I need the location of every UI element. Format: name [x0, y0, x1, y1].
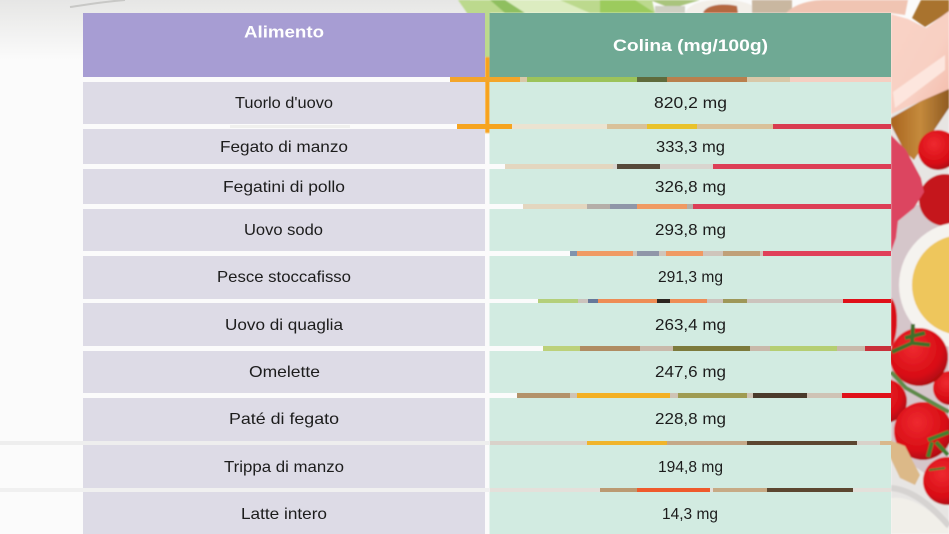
row: Paté di fegato: [83, 398, 891, 441]
yellow bowl: [899, 222, 949, 348]
tomato 1: [918, 130, 949, 170]
wooden board: [912, 0, 949, 27]
row: Trippa di manzo: [83, 445, 891, 488]
nut bowl: [685, 0, 760, 13]
row: Paté di fegato: 228,8 mg: [655, 411, 726, 428]
row: Omelette: Omelette: [249, 364, 320, 381]
row: Uovo sodo: Uovo sodo: [244, 222, 323, 239]
row: Trippa di manzo: 194,8 mg: [658, 459, 723, 476]
row: Fegato di manzo: [83, 129, 891, 164]
lettuce: [458, 0, 655, 57]
row: Latte intero: 14,3 mg: [662, 506, 718, 523]
photo strip gaps: [450, 77, 891, 492]
row: Fegato di manzo: Fegato di manzo: [220, 139, 348, 156]
vertical orange stripe: [485, 57, 490, 133]
raw meat: [891, 135, 924, 252]
row: Latte intero: [83, 492, 891, 534]
row: Tuorlo d'uovo: Tuorlo d'uovo: [235, 95, 333, 112]
row: Paté di fegato: Paté di fegato: [229, 411, 339, 428]
row: Uovo sodo: [83, 209, 891, 251]
chicken top: [786, 0, 908, 15]
row: Fegato di manzo: 333,3 mg: [656, 139, 725, 156]
row: Tuorlo d'uovo: [83, 82, 891, 124]
white plate: [891, 498, 949, 534]
row: Fegatini di pollo: 326,8 mg: [655, 179, 726, 196]
backdrop near chicken: [752, 0, 792, 13]
row: Fegatini di pollo: Fegatini di pollo: [223, 179, 345, 196]
table header: Colina: Colina (mg/100g): [613, 36, 768, 55]
chicken breast: [891, 11, 949, 114]
row: Omelette: 247,6 mg: [655, 364, 726, 381]
table header: Colina: [490, 13, 891, 77]
background: food photo: [458, 0, 949, 534]
row: Uovo di quaglia: 263,4 mg: [655, 317, 726, 334]
row: Uovo di quaglia: Uovo di quaglia: [225, 317, 343, 334]
avocado: [650, 0, 700, 6]
row: Pesce stoccafisso: 291,3 mg: [658, 269, 723, 286]
row: Pesce stoccafisso: [83, 256, 891, 299]
table header: Alimento: Alimento: [244, 22, 324, 42]
row: Uovo di quaglia: [83, 303, 891, 346]
tomato 2: [919, 174, 949, 226]
row: Trippa di manzo: Trippa di manzo: [224, 459, 344, 476]
row: Latte intero: Latte intero: [241, 506, 327, 523]
tabletop shadow area: [891, 100, 949, 534]
tomatoes bottom: [863, 379, 907, 423]
table header: Alimento: [83, 13, 485, 77]
row: Tuorlo d'uovo: 820,2 mg: [654, 95, 727, 112]
tomato behind: [891, 298, 897, 347]
row: Fegatini di pollo: [83, 169, 891, 204]
row: Pesce stoccafisso: Pesce stoccafisso: [217, 269, 351, 286]
wooden stick: [889, 440, 920, 485]
row: Uovo sodo: 293,8 mg: [655, 222, 726, 239]
row: Omelette: [83, 351, 891, 393]
